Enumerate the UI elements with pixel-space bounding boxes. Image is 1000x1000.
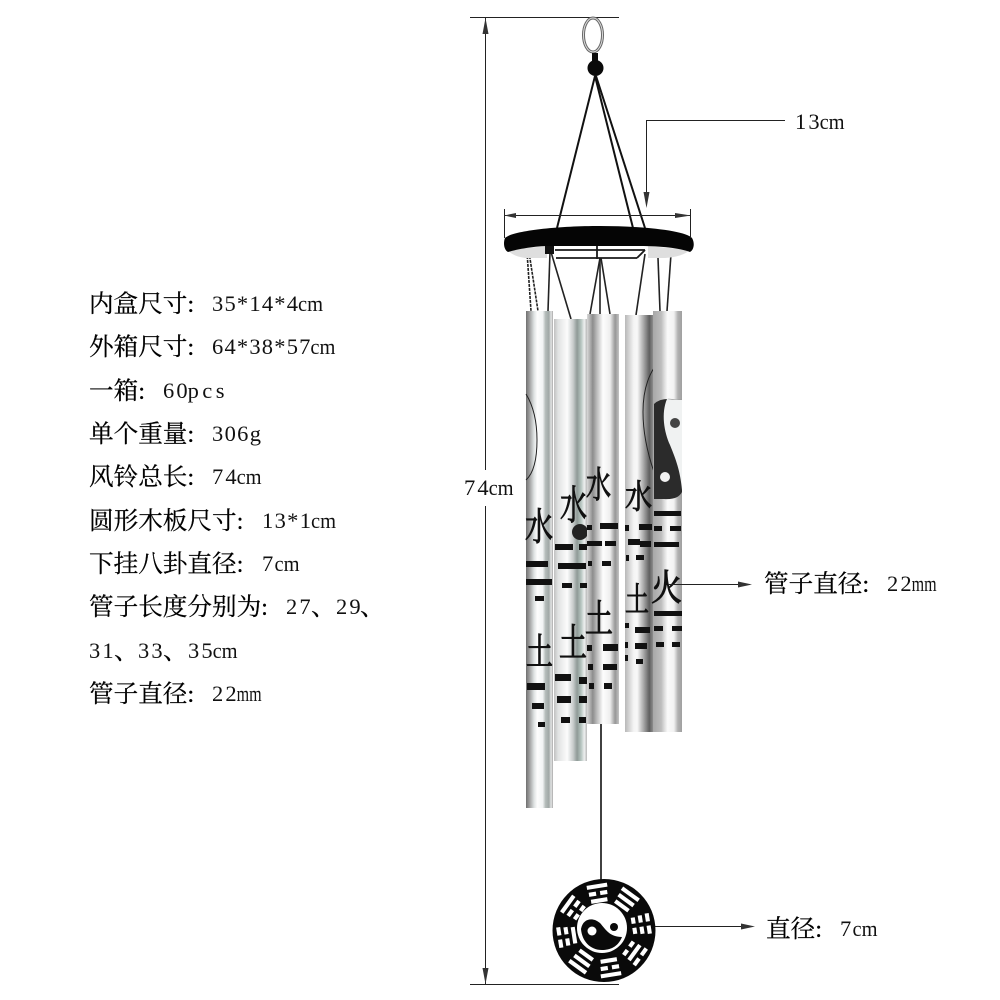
label: disc diameter: 直径: (766, 915, 822, 943)
spec: carton quantity: pcs (188, 378, 224, 403)
tube 1: 水 (525, 496, 553, 551)
spec: bagua diameter: 7 (262, 551, 273, 576)
total height dimension: 74cm: 74 (464, 475, 489, 500)
spec: tube lengths line two: 33 (138, 638, 163, 663)
spec: carton size: 外箱尺寸: (89, 333, 194, 361)
bagua pendant disc (550, 877, 658, 984)
spec: total length: 74 (212, 464, 237, 489)
spec: carton size: 64*38*57 (212, 334, 310, 359)
board width dimension: 13cm (504, 209, 691, 238)
label: 13cm (795, 109, 845, 134)
spec: carton quantity (89, 377, 224, 405)
leader arrow from disc (655, 924, 755, 930)
spec: tube lengths line one: 27 (286, 594, 311, 619)
spec: tube lengths line two: 35 (188, 638, 213, 663)
spec: tube diameter: 22 (212, 681, 237, 706)
spec: tube lengths line one: 、 (360, 594, 385, 621)
tube 4: 土 (625, 574, 649, 621)
tube 3: 土 (585, 588, 613, 643)
spec: bagua diameter: cm (274, 551, 300, 576)
label: disc diameter: 7 (840, 916, 851, 941)
tube 1 (525, 311, 553, 808)
spec: total length: cm (237, 464, 262, 489)
tube 2: 土 (559, 612, 587, 667)
label: tube diameter: 22 (887, 571, 912, 596)
spec: inner box size: 35*14*4 (212, 291, 298, 316)
spec: inner box size: 内盒尺寸: (89, 290, 194, 318)
total height dimension: 74cm (464, 18, 619, 984)
specification text list (89, 290, 385, 708)
spec: tube lengths line two: 、 (114, 638, 139, 665)
spec: tube diameter: mm (237, 681, 262, 706)
spec: wooden board size (89, 507, 336, 535)
spec: unit weight: 单个重量: (89, 420, 194, 448)
taiji symbol (581, 919, 622, 950)
spec: tube lengths line one: 、 (311, 594, 336, 621)
label: disc diameter: cm (852, 916, 878, 941)
pendant cord (600, 724, 602, 882)
spec: tube lengths line two: 、 (163, 638, 188, 665)
spec: tube lengths line two (89, 638, 238, 665)
spec: tube lengths line two: 31 (89, 638, 114, 663)
spec: wooden board size: 13*1 (262, 508, 311, 533)
spec: carton size (89, 333, 336, 361)
tube 5: 火 (651, 560, 682, 611)
tube 5 (651, 311, 682, 732)
leader arrow to board (644, 120, 785, 208)
tube 3 (585, 314, 619, 724)
spec: bagua diameter: 下挂八卦直径: (89, 550, 243, 578)
hanging ropes (557, 76, 645, 228)
spec: tube lengths line one (89, 593, 385, 621)
label: tube diameter: mm (912, 571, 937, 596)
spec: unit weight (89, 420, 261, 448)
spec: tube lengths line one: 29 (336, 594, 361, 619)
leader arrow from tube (668, 582, 752, 588)
total height dimension: 74cm: cm (489, 475, 514, 500)
label: disc diameter (766, 915, 878, 943)
tube 1: 土 (526, 624, 553, 675)
spec: wooden board size: 圆形木板尺寸: (89, 507, 243, 535)
tube 3: 水 (586, 457, 611, 508)
spec: carton quantity: 60 (163, 378, 188, 403)
label: tube diameter (764, 570, 937, 598)
tube 2 (554, 319, 588, 761)
spec: tube diameter: 管子直径: (89, 680, 194, 708)
spec: total length (89, 463, 262, 491)
spec: wooden board size: cm (311, 508, 336, 533)
spec: inner box size: cm (298, 291, 323, 316)
tube 2: 水 (560, 474, 587, 531)
hanging ring (584, 18, 602, 52)
spec: tube lengths line one: 管子长度分别为: (89, 593, 268, 621)
wooden ring board (504, 226, 694, 259)
spec: inner box size (89, 290, 323, 318)
spec: unit weight: 306g (212, 421, 261, 446)
label: tube diameter: 管子直径: (764, 570, 869, 598)
spec: tube lengths line two: cm (213, 638, 238, 663)
spec: tube diameter (89, 680, 262, 708)
hanger bead (588, 53, 604, 76)
tube 4 (625, 315, 654, 732)
eight trigrams (550, 877, 658, 984)
spec: carton size: cm (310, 334, 336, 359)
tube 4: 水 (625, 471, 652, 518)
lower ropes to tubes (527, 252, 671, 319)
spec: total length: 风铃总长: (89, 463, 194, 491)
label: 13cm: 13 (795, 109, 820, 134)
label: 13cm: cm (820, 109, 845, 134)
spec: carton quantity: 一箱: (89, 377, 145, 405)
yin-yang on tube (654, 399, 682, 499)
